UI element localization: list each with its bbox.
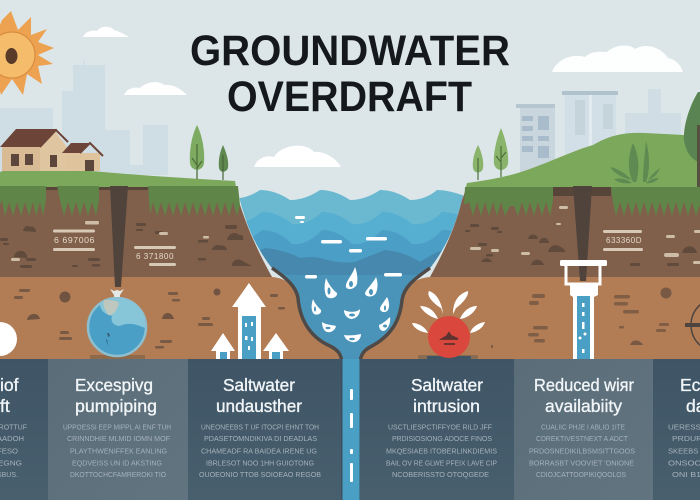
panel: far left: iof <box>0 375 19 395</box>
right city skyline <box>516 89 681 176</box>
basin outline <box>272 268 430 362</box>
panel: excessive pumping: UPPOESSI EEP MIPPL AI ENF TUH <box>63 424 171 432</box>
panel: excessive pumping: EQDVEISS UN ID AKSTING <box>72 460 162 468</box>
panel: excessive pumping: pumpiping <box>75 396 157 416</box>
right bank upper soil <box>430 186 700 277</box>
soil depth label left 2 <box>134 246 176 266</box>
soil specks <box>0 223 697 348</box>
title: OVERDRAFT <box>227 73 472 121</box>
right hill top band <box>553 186 611 196</box>
soil depth label left 1: 6 697006 <box>54 236 95 245</box>
panel: saltwater intrusion: Saltwater <box>411 375 483 395</box>
cloud upper right <box>552 46 683 72</box>
panel: reduced water availability <box>514 359 653 500</box>
panel: excessive pumping <box>48 359 188 500</box>
panel: saltwater intrusion: MKQESIAEB ITOBERLINKDIEMIS <box>386 448 497 456</box>
panel: saltwater undausther: PDASETOMNDIKIVA DI DEADLAS <box>204 436 317 443</box>
panel: saltwater intrusion <box>360 359 514 500</box>
plant <box>610 141 660 183</box>
panel: saltwater intrusion: BAIL OV RE GLWE PFEIX LAVE CIP <box>386 460 497 468</box>
water droplets <box>312 267 390 342</box>
globe icon <box>88 289 146 359</box>
panel: reduced water availability: CUALIIC PHJE I ABLIO 1ITE <box>541 424 625 432</box>
cloud centre <box>254 146 341 167</box>
right well shaft <box>573 186 592 281</box>
soil depth label left 1 <box>53 230 95 251</box>
tree right small <box>473 145 483 180</box>
panel: far right: ONSOON <box>668 460 700 468</box>
panel: saltwater undausther: UNEONEEBS T UF ITOCPI EHNT TOH <box>201 424 319 432</box>
panel: saltwater undausther: OUOEONIO TTOB SOIOEAO REGOB <box>199 472 321 479</box>
house <box>0 129 103 171</box>
panel: excessive pumping: Excespivg <box>75 375 153 395</box>
tree left small <box>219 145 228 180</box>
panel: reduced water availability: CDIOJCATTOOPIKIQOOLOS <box>536 472 626 479</box>
tree left tall <box>190 125 204 179</box>
panel: saltwater undausther <box>188 359 342 500</box>
panel: reduced water availability: Reduced wiяr <box>534 375 634 395</box>
panel: reduced water availability: CDREKTIVESTNEXT A ADCT <box>536 436 629 443</box>
sky background <box>0 0 700 360</box>
panel: excessive pumping: PLAYTHWENIFFEK EANLING <box>70 448 167 456</box>
saltwater plant icon <box>412 291 485 359</box>
lower soil right <box>360 277 700 360</box>
panel: saltwater intrusion: intrusion <box>413 396 480 416</box>
left city skyline <box>0 60 168 178</box>
water highlights <box>295 216 402 278</box>
panel: far right: Ec <box>680 375 700 395</box>
left grass roots <box>0 186 240 216</box>
left grass hill <box>0 167 236 187</box>
cloud mid left <box>124 82 187 95</box>
tree right tall <box>494 128 508 177</box>
up arrows icon <box>211 283 289 360</box>
left hill top band <box>0 186 236 190</box>
well pipe icon <box>560 260 607 360</box>
right grass roots <box>464 187 700 216</box>
soil depth label right <box>603 230 643 251</box>
tree right edge <box>684 92 700 187</box>
panel: saltwater undausther: IBRLESOT NOO 1HH GUIOTONG <box>206 460 314 468</box>
panel: far right: ONI B1O <box>672 472 700 479</box>
title: GROUNDWATER <box>190 27 510 75</box>
panel: far left: ft <box>0 396 10 416</box>
soil depth label right: 633360D <box>606 236 642 245</box>
panel: saltwater undausther: CHAMEADF RA BAIDEA IRENE UG <box>201 448 317 456</box>
sun <box>0 11 54 95</box>
title <box>190 27 510 121</box>
right grass hill <box>466 133 700 187</box>
lower soil left <box>0 277 342 360</box>
cloud top left <box>83 27 129 37</box>
panel: saltwater intrusion: USCTLIESPCTIFFYOE RILD JFF <box>388 424 492 432</box>
soil depth label left 2: 6 371800 <box>136 252 174 261</box>
panel: saltwater intrusion: PRDISIOSIONG ADOCE FINOS <box>392 436 492 443</box>
central water stream <box>341 359 361 500</box>
panel: excessive pumping: CRINNDHIE MLMID IOMN MOF <box>67 436 170 443</box>
white sphere icon <box>0 322 17 356</box>
panel: saltwater intrusion: NCOBERISSTO OTOQGEDE <box>392 472 489 479</box>
panel: reduced water availability: PRDOSNEDIKILBSMSITTGOOS <box>529 448 635 456</box>
panel: far right <box>653 359 700 500</box>
crosshair icon <box>685 298 700 352</box>
panel: reduced water availability: BORRASBT VOOVIET 'ONIONE <box>529 460 634 468</box>
left well shaft <box>110 186 128 287</box>
pale stones <box>11 206 700 264</box>
panel: excessive pumping: DKOTTOCHCFAMREROKI TIO <box>70 472 167 479</box>
panel: far left <box>0 359 48 500</box>
left bank upper soil <box>0 186 272 277</box>
water basin <box>230 190 470 360</box>
panel: reduced water availability: availabiity <box>545 396 622 416</box>
panel: saltwater undausther: undausther <box>216 396 302 416</box>
panel: saltwater undausther: Saltwater <box>223 375 295 395</box>
